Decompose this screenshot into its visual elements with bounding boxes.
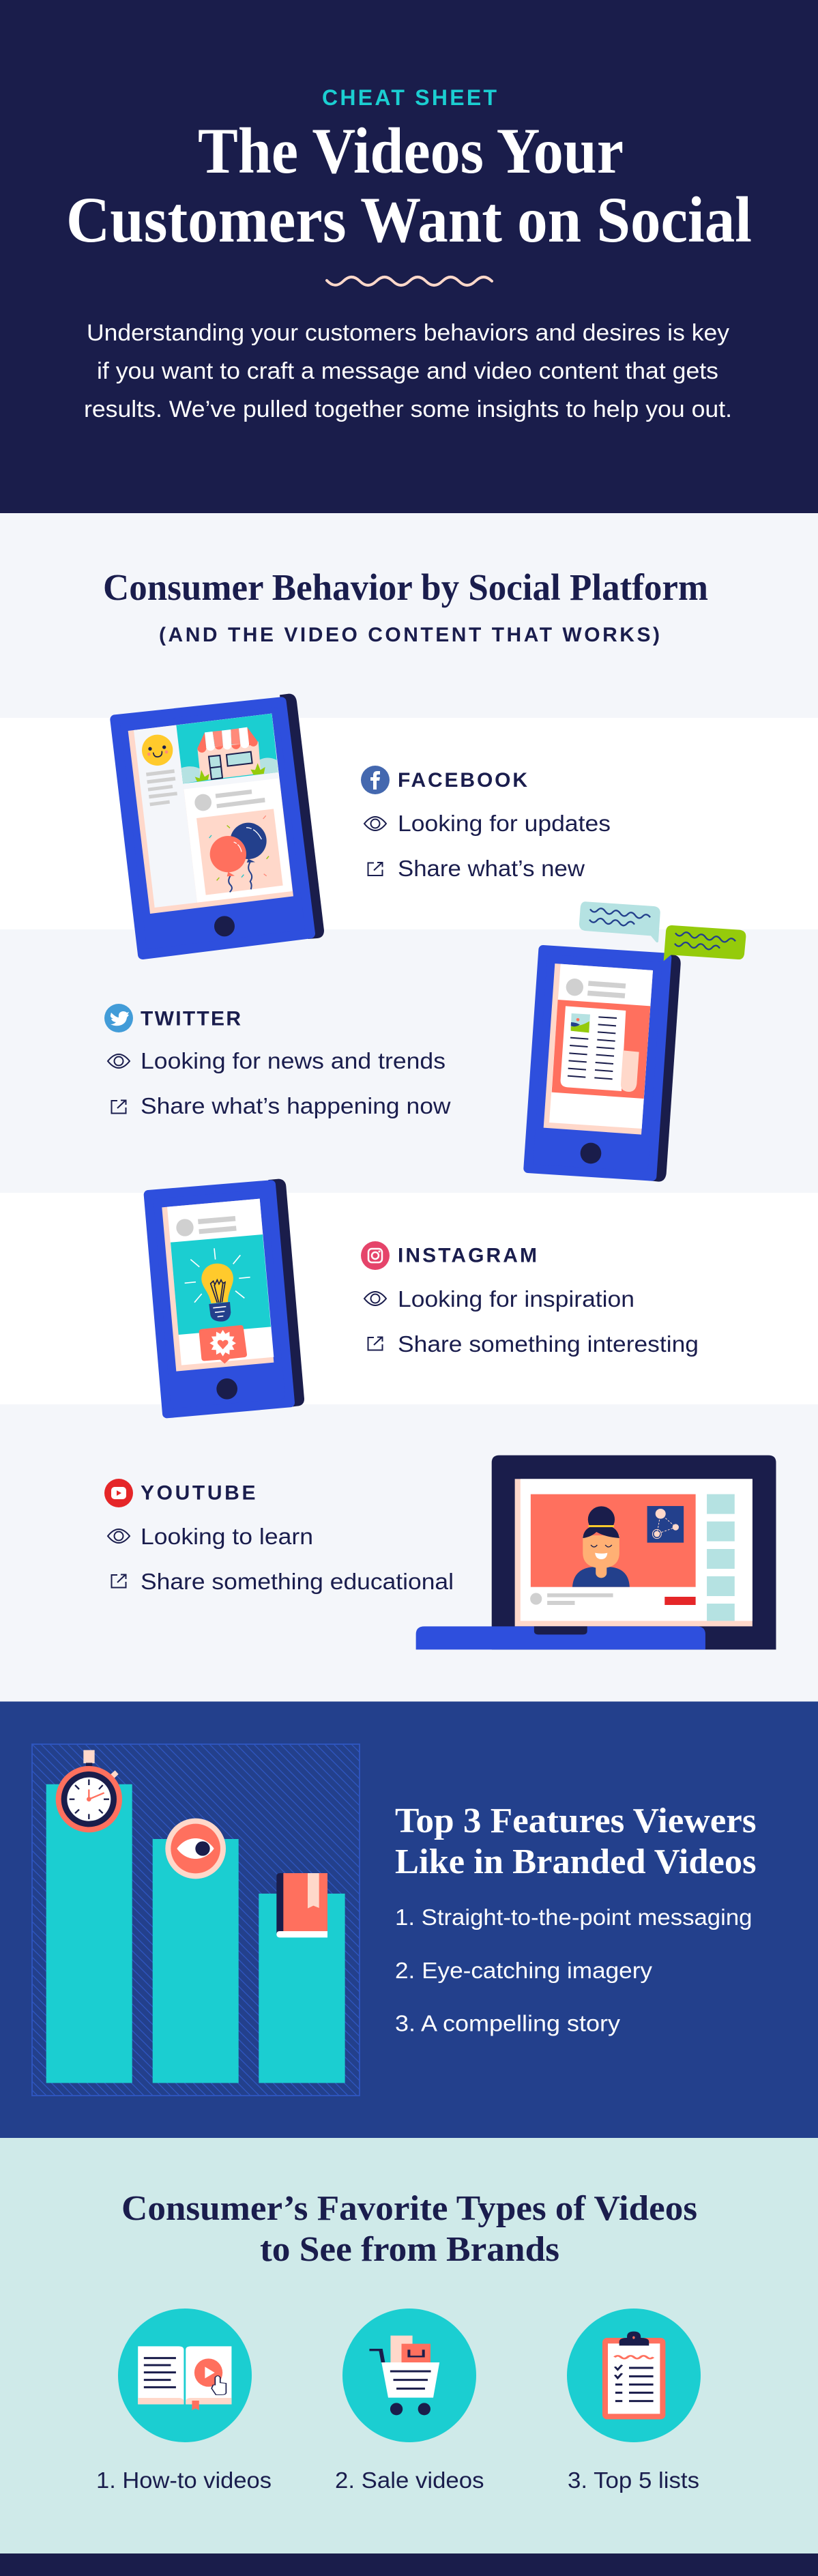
list: features: 1. Straight-to-the-point messaging	[395, 1905, 752, 1930]
row: twitter text: Share what’s happening now	[141, 1093, 451, 1118]
list: features	[395, 1905, 752, 2036]
intro paragraph: Understanding your customers behaviors and desires is key	[87, 320, 729, 346]
icon: how-to book	[118, 2309, 252, 2442]
panel: section heading background	[0, 513, 818, 718]
panel: top 3 features	[0, 1702, 818, 2138]
diagram inset	[647, 1506, 684, 1543]
illustration: youtube laptop	[416, 1456, 776, 1649]
panel: header	[0, 0, 818, 513]
title: The Videos Your	[198, 115, 624, 187]
heading: favorite types	[121, 2189, 697, 2269]
icon: stopwatch	[56, 1750, 122, 1832]
icon: instagram	[361, 1241, 390, 1270]
labels: video types: 1. How-to videos	[96, 2468, 272, 2493]
panel: twitter band	[0, 929, 818, 1193]
panel: instagram band	[0, 1193, 818, 1404]
icon: eye badge	[165, 1819, 226, 1879]
row: youtube text	[104, 1479, 454, 1594]
illustration: twitter phone	[528, 901, 746, 1182]
heading: top 3 features: Like in Branded Videos	[395, 1842, 756, 1881]
title: Customers Want on Social	[66, 184, 752, 256]
row: instagram text: Looking for inspiration	[398, 1286, 634, 1312]
icon: eye	[108, 1529, 130, 1543]
list: features: 2. Eye-catching imagery	[395, 1958, 653, 1983]
intro paragraph: if you want to craft a message and video content that gets	[97, 358, 718, 384]
chat bubble: light	[579, 901, 660, 942]
labels: video types: 3. Top 5 lists	[568, 2468, 699, 2493]
icon: eye	[364, 817, 386, 830]
illustration: instagram phone	[148, 1179, 304, 1414]
icon: share	[112, 1100, 126, 1114]
heading: consumer behavior	[103, 566, 708, 646]
balloons	[209, 815, 269, 892]
bar chart illustration	[32, 1744, 360, 2096]
heading: favorite types: to See from Brands	[260, 2230, 559, 2269]
footer band	[0, 2553, 818, 2576]
row: twitter text: TWITTER	[141, 1007, 241, 1030]
icon: twitter	[104, 1004, 133, 1032]
heading: consumer behavior: (AND THE VIDEO CONTENT THAT WORKS)	[159, 624, 660, 646]
presenter	[572, 1506, 630, 1587]
intro paragraph: results. We’ve pulled together some insights to help you out.	[84, 396, 732, 422]
panel: facebook band	[0, 718, 818, 929]
labels: video types	[96, 2468, 699, 2493]
illustration: facebook tablet	[115, 694, 324, 955]
icon: shopping cart	[342, 2309, 476, 2442]
wavy divider	[327, 277, 492, 285]
icon: share	[368, 1337, 382, 1350]
row: instagram text	[361, 1241, 699, 1357]
labels: video types: 2. Sale videos	[335, 2468, 484, 2493]
icon: book	[276, 1873, 327, 1937]
eyebrow: cheat sheet: CHEAT SHEET	[322, 85, 497, 110]
row: twitter text	[104, 1004, 451, 1118]
icon: share	[112, 1575, 126, 1587]
row: instagram text: Share something interesting	[398, 1331, 699, 1357]
icon: youtube	[104, 1479, 133, 1507]
intro paragraph	[84, 320, 732, 422]
row: facebook text: Share what’s new	[398, 856, 585, 881]
row: youtube text: Looking to learn	[141, 1524, 313, 1549]
heading: top 3 features	[395, 1801, 756, 1881]
notification badge	[199, 1325, 247, 1363]
heading: consumer behavior: Consumer Behavior by Social Platform	[103, 566, 708, 608]
row: facebook text: FACEBOOK	[398, 769, 527, 792]
smiley avatar	[142, 735, 173, 766]
icon: clipboard	[567, 2309, 701, 2442]
lightbulb	[185, 1248, 250, 1322]
row: youtube text: YOUTUBE	[141, 1482, 255, 1504]
panel: youtube band	[0, 1404, 818, 1702]
row: facebook text: Looking for updates	[398, 811, 611, 836]
panel: favorite video types	[0, 2138, 818, 2553]
list: features: 3. A compelling story	[395, 2010, 621, 2036]
chat bubble: green	[664, 925, 746, 961]
heading: favorite types: Consumer’s Favorite Types of Videos	[121, 2189, 697, 2228]
row: youtube text: Share something educational	[141, 1569, 454, 1594]
row: twitter text: Looking for news and trends	[141, 1048, 445, 1073]
row: instagram text: INSTAGRAM	[398, 1245, 537, 1267]
heading: top 3 features: Top 3 Features Viewers	[395, 1801, 756, 1840]
title	[66, 115, 752, 256]
icon: share	[368, 863, 382, 875]
icon: eye	[364, 1292, 386, 1305]
row: facebook text	[361, 766, 611, 881]
icon: facebook	[361, 766, 390, 794]
icon: eye	[108, 1054, 130, 1068]
